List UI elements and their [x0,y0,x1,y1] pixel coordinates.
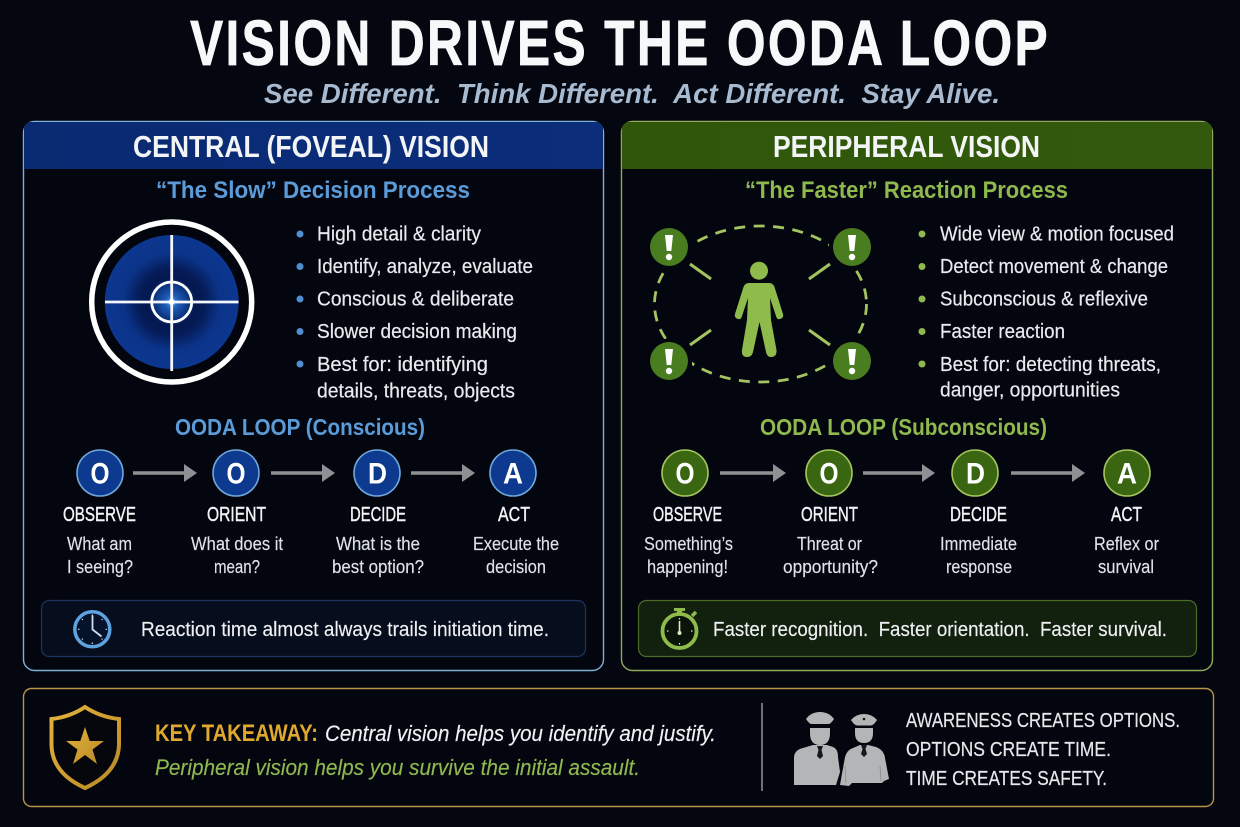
peripheral OODA loop steps [644,450,1159,577]
peripheral OODA loop steps: Immediate [940,534,1017,554]
central OODA loop steps: I seeing? [67,557,133,577]
central OODA loop steps [63,450,559,577]
central callout [42,600,586,656]
peripheral OODA loop steps: opportunity? [783,557,878,577]
subtitle: See Different. Think Different. Act Different. Stay Alive. [264,78,1000,109]
panel: key takeaway [24,688,1214,806]
central OODA loop steps: decision [486,557,546,577]
peripheral OODA loop steps: survival [1098,557,1154,577]
panel: peripheral vision [622,122,1212,670]
peripheral callout [638,600,1196,656]
icon: crosshair target [92,222,252,382]
peripheral feature list: Faster reaction [940,321,1065,343]
peripheral feature list [918,224,1174,402]
icon: stopwatch [662,608,696,648]
peripheral OODA loop steps: Threat or [797,534,862,554]
divider [761,703,763,791]
central feature list: Best for: identifying [317,354,488,376]
icon: clock [75,612,110,647]
central OODA loop steps: O [226,458,246,490]
peripheral panel header bar [622,122,1212,169]
icon: two officers [794,712,889,786]
peripheral OODA loop steps: ORIENT [801,504,858,526]
central OODA loop steps: mean? [214,557,260,577]
icon: person with surrounding threats [646,225,875,383]
central subheading: “The Slow” Decision Process [156,177,470,204]
central OODA loop steps: What is the [336,534,420,554]
peripheral OODA loop steps: Something’s [644,534,733,554]
callout text: Faster recognition. Faster orientation. Faster survival. [713,619,1167,641]
peripheral OODA loop steps: O [820,458,838,490]
central feature list: High detail & clarity [317,224,481,246]
peripheral OODA heading: OODA LOOP (Subconscious) [760,414,1047,440]
central OODA loop steps: DECIDE [350,504,406,526]
central OODA loop steps: What does it [191,534,283,554]
central OODA loop steps: O [90,458,110,490]
closing statements: AWARENESS CREATES OPTIONS. [906,710,1180,732]
peripheral OODA loop steps: A [1117,458,1137,490]
closing statements: OPTIONS CREATE TIME. [906,739,1111,761]
central OODA loop steps: What am [67,534,132,554]
central feature list: Conscious & deliberate [317,288,514,310]
central vision takeaway: Central vision helps you identify and justify. [325,721,716,746]
peripheral vision takeaway: Peripheral vision helps you survive the initial assault. [155,755,640,780]
central OODA loop steps: D [368,458,387,490]
central feature list: Slower decision making [317,321,517,343]
closing statements: TIME CREATES SAFETY. [906,768,1107,790]
central feature list [296,224,533,402]
central OODA loop steps: Execute the [473,534,559,554]
panel: central vision [24,122,604,670]
peripheral OODA loop steps: D [966,458,985,490]
callout text: Reaction time almost always trails initiation time. [141,619,549,641]
icon: shield with star [52,707,119,788]
peripheral OODA loop steps: response [946,557,1012,577]
peripheral feature list: Wide view & motion focused [940,224,1174,246]
central feature list: details, threats, objects [317,380,515,402]
peripheral feature list: danger, opportunities [940,380,1120,402]
peripheral OODA loop steps: happening! [647,557,728,577]
peripheral feature list: Best for: detecting threats, [940,354,1161,376]
central OODA loop steps: OBSERVE [63,504,136,526]
peripheral feature list: Detect movement & change [940,256,1168,278]
peripheral feature list: Subconscious & reflexive [940,288,1148,310]
peripheral OODA loop steps: OBSERVE [653,504,722,526]
peripheral OODA loop steps: DECIDE [950,504,1007,526]
central OODA heading: OODA LOOP (Conscious) [175,414,425,440]
closing statements [906,710,1180,790]
peripheral heading: PERIPHERAL VISION [773,129,1040,164]
central feature list: Identify, analyze, evaluate [317,256,533,278]
central OODA loop steps: ORIENT [207,504,266,526]
central OODA loop steps: best option? [332,557,424,577]
peripheral OODA loop steps: ACT [1111,504,1142,526]
peripheral subheading: “The Faster” Reaction Process [745,177,1068,204]
central OODA loop steps: ACT [498,504,530,526]
key takeaway label: KEY TAKEAWAY: [155,720,318,747]
central OODA loop steps: A [503,458,523,490]
central heading: CENTRAL (FOVEAL) VISION [133,129,489,164]
peripheral OODA loop steps: O [676,458,694,490]
central panel header bar [24,122,603,169]
peripheral OODA loop steps: Reflex or [1094,534,1159,554]
